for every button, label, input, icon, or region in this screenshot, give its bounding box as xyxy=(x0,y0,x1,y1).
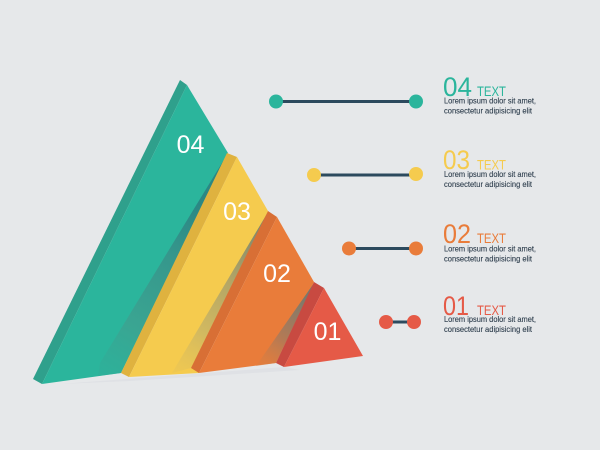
segment 04: 04 xyxy=(177,131,204,159)
connector 04 xyxy=(269,94,423,108)
segment 01: 01 xyxy=(314,318,341,346)
text block 03: TEXT xyxy=(477,158,506,172)
text block 01: TEXT xyxy=(477,303,506,318)
text block 02: Lorem ipsum dolor sit amet, xyxy=(444,244,536,254)
text block 03: Lorem ipsum dolor sit amet, xyxy=(444,169,536,179)
segment 03 xyxy=(121,153,268,377)
text block 02: TEXT xyxy=(477,231,506,246)
text block 03: 03 xyxy=(443,145,470,175)
segment 02: 02 xyxy=(263,260,291,288)
pyramid xyxy=(33,80,363,384)
text block 02 xyxy=(443,219,536,264)
text block 02: 02 xyxy=(443,219,471,249)
text block 04: consectetur adipisicing elit xyxy=(444,106,533,116)
text block 01: 01 xyxy=(443,291,469,321)
connector 02 xyxy=(342,242,423,256)
text block 03 xyxy=(443,145,536,189)
text block 02: consectetur adipisicing elit xyxy=(444,254,533,264)
ground shadow xyxy=(60,367,300,384)
text block 04: 04 xyxy=(443,72,472,102)
text block 03: consectetur adipisicing elit xyxy=(444,179,533,189)
text block 04: Lorem ipsum dolor sit amet, xyxy=(444,96,536,106)
connector 03 xyxy=(307,167,423,182)
text block 01 xyxy=(443,291,536,334)
text block 01: Lorem ipsum dolor sit amet, xyxy=(444,314,536,324)
text block 04 xyxy=(443,72,536,116)
segment 02 xyxy=(191,211,314,373)
segment 04 xyxy=(33,80,228,384)
text block 01: consectetur adipisicing elit xyxy=(444,324,533,334)
text block 04: TEXT xyxy=(477,84,506,99)
segment 03: 03 xyxy=(223,198,251,226)
connector 01 xyxy=(379,315,421,329)
segment 01 xyxy=(276,282,363,367)
